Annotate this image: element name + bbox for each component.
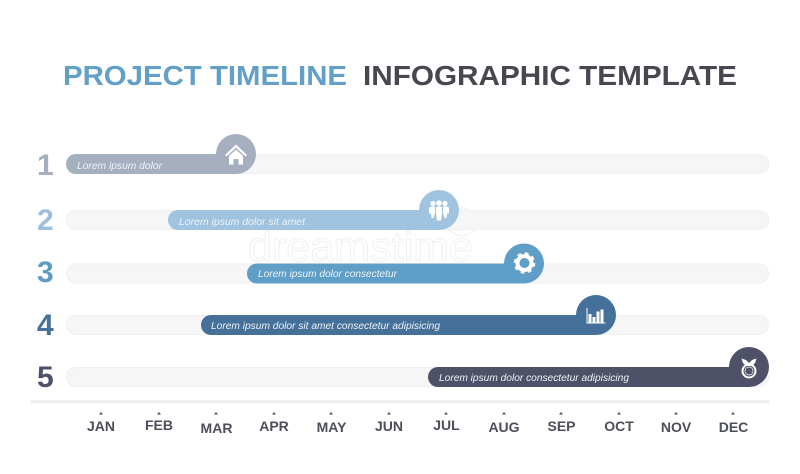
number 4: 4 bbox=[37, 309, 54, 342]
month axis labels: NOV bbox=[661, 419, 692, 435]
month axis labels: MAY bbox=[317, 419, 347, 435]
month axis labels: JUL bbox=[433, 417, 460, 433]
track 3 bbox=[66, 264, 768, 283]
track 4 bbox=[66, 316, 768, 334]
bar 4 bbox=[201, 295, 616, 335]
bar label 5: Lorem ipsum dolor consectetur adipisicing bbox=[439, 372, 629, 384]
number 1: 1 bbox=[37, 149, 54, 182]
bar 1 bbox=[66, 134, 256, 174]
row 1 bbox=[37, 134, 768, 182]
icon: gear bbox=[516, 254, 534, 272]
title: PROJECT TIMELINE bbox=[63, 60, 347, 91]
month axis labels: JAN bbox=[87, 418, 115, 434]
bar 3 bbox=[247, 244, 544, 284]
month axis labels: FEB bbox=[145, 417, 173, 433]
bar 2 bbox=[168, 190, 459, 230]
track 2 bbox=[66, 210, 768, 230]
bar 5 bbox=[428, 347, 769, 387]
track 5 bbox=[66, 368, 768, 386]
icon: people bbox=[429, 200, 449, 220]
month axis labels: MAR bbox=[201, 420, 232, 436]
number 2: 2 bbox=[37, 204, 54, 237]
month axis labels: SEP bbox=[547, 418, 576, 434]
bar label 2: Lorem ipsum dolor sit amet bbox=[179, 216, 306, 228]
bar label 4: Lorem ipsum dolor sit amet consectetur adipisicing bbox=[211, 320, 440, 332]
timeline axis bbox=[31, 400, 769, 404]
month axis labels bbox=[87, 412, 748, 436]
month axis labels: DEC bbox=[719, 419, 748, 435]
watermark: dreamstime bbox=[248, 223, 473, 270]
title: INFOGRAPHIC TEMPLATE bbox=[363, 60, 737, 91]
row 5 bbox=[37, 347, 769, 394]
row 2 bbox=[37, 190, 768, 237]
month axis labels: JUN bbox=[375, 418, 403, 434]
bar label 1: Lorem ipsum dolor bbox=[77, 160, 162, 172]
number 3: 3 bbox=[37, 256, 54, 289]
icon: medal bbox=[742, 358, 756, 378]
track 1 bbox=[66, 154, 768, 174]
icon: house bbox=[225, 144, 247, 164]
month axis labels: APR bbox=[259, 418, 289, 434]
icon: bar chart bbox=[586, 308, 606, 324]
title bbox=[63, 60, 737, 91]
row 3 bbox=[37, 244, 768, 289]
month axis labels: AUG bbox=[488, 419, 520, 435]
number 5: 5 bbox=[37, 361, 54, 394]
month axis labels: OCT bbox=[604, 418, 634, 434]
row 4 bbox=[37, 295, 768, 342]
bar label 3: Lorem ipsum dolor consectetur bbox=[258, 268, 397, 280]
